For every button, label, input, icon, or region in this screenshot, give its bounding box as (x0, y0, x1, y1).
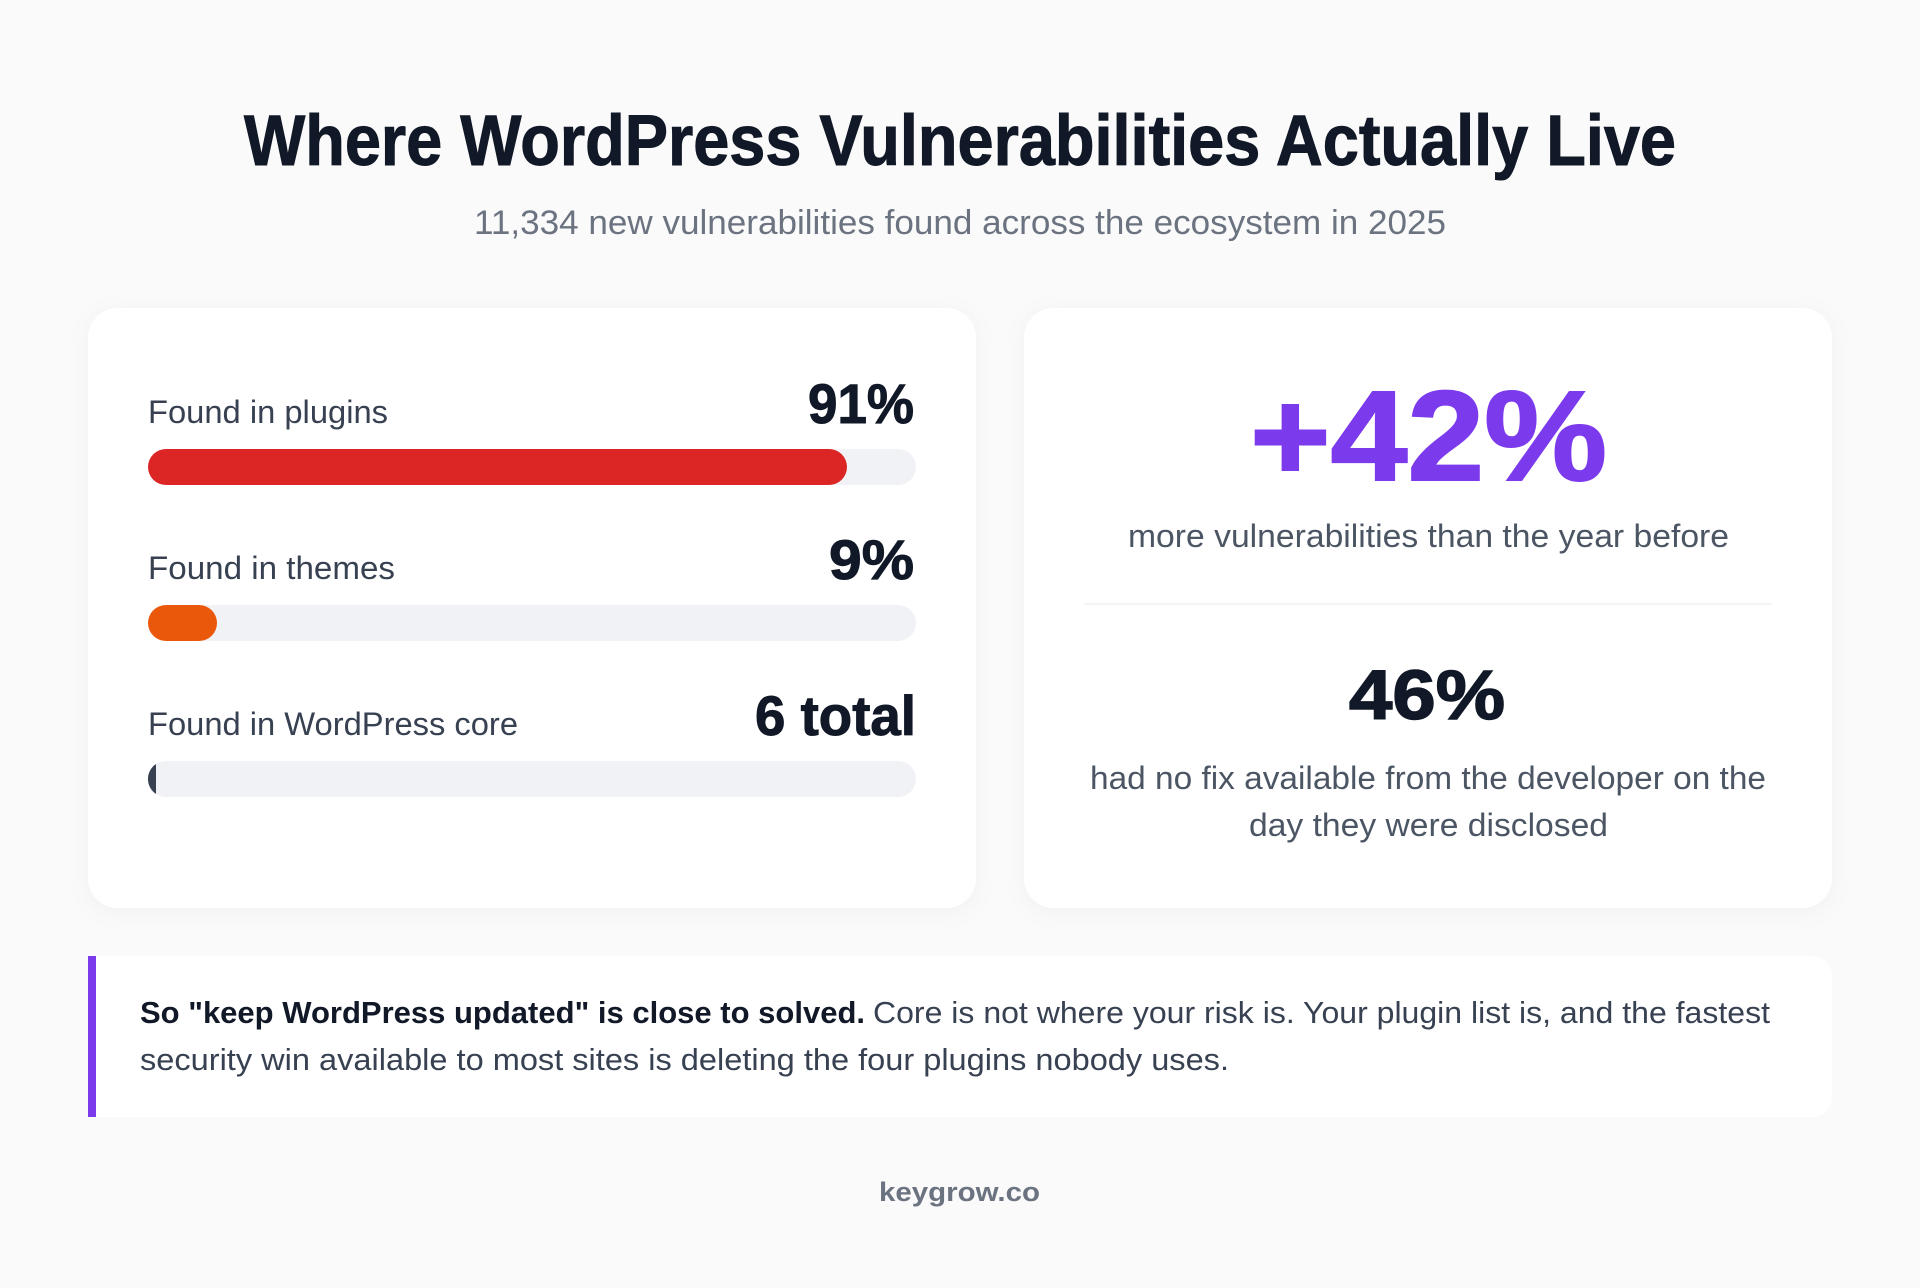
callout text: security win available to most sites is deleting the four plugins nobody uses. (140, 1042, 1229, 1077)
callout text: So "keep WordPress updated" is close to solved. (140, 995, 865, 1030)
row: themes: Found in themes (148, 550, 395, 586)
panel: where vulnerabilities are found (88, 308, 976, 908)
stat: +42%: +42% (1250, 365, 1607, 508)
row: plugins: Found in plugins (148, 394, 388, 430)
callout (88, 956, 1832, 1117)
subtitle: 11,334 new vulnerabilities found across the ecosystem in 2025 (474, 204, 1446, 242)
row: plugins: 91% (808, 372, 914, 435)
stat: 46%: 46% (1349, 656, 1505, 734)
row: themes: 9% (829, 528, 914, 591)
row: WordPress core (148, 684, 916, 797)
panel background (88, 308, 976, 908)
callout text: Core is not where your risk is. Your plugin list is, and the fastest (873, 995, 1770, 1030)
row: plugins (148, 372, 916, 485)
stat caption: no fix available: had no fix available from the developer on the (1090, 760, 1766, 796)
row: WordPress core: Found in WordPress core (148, 706, 518, 742)
callout background (88, 956, 1832, 1117)
footer: source: keygrow.co (879, 1177, 1040, 1207)
callout accent bar (88, 956, 96, 1117)
row: themes (148, 528, 916, 641)
stat caption: year over year: more vulnerabilities than the year before (1128, 518, 1729, 554)
stat caption: no fix available (1090, 760, 1766, 843)
row: WordPress core: 6 total (755, 684, 916, 747)
stat caption: no fix available: day they were disclosed (1249, 807, 1608, 843)
panel: key statistics (1024, 308, 1832, 908)
panel background (1024, 308, 1832, 908)
title: Where WordPress Vulnerabilities Actually Live (244, 102, 1676, 181)
callout text (140, 995, 1770, 1077)
